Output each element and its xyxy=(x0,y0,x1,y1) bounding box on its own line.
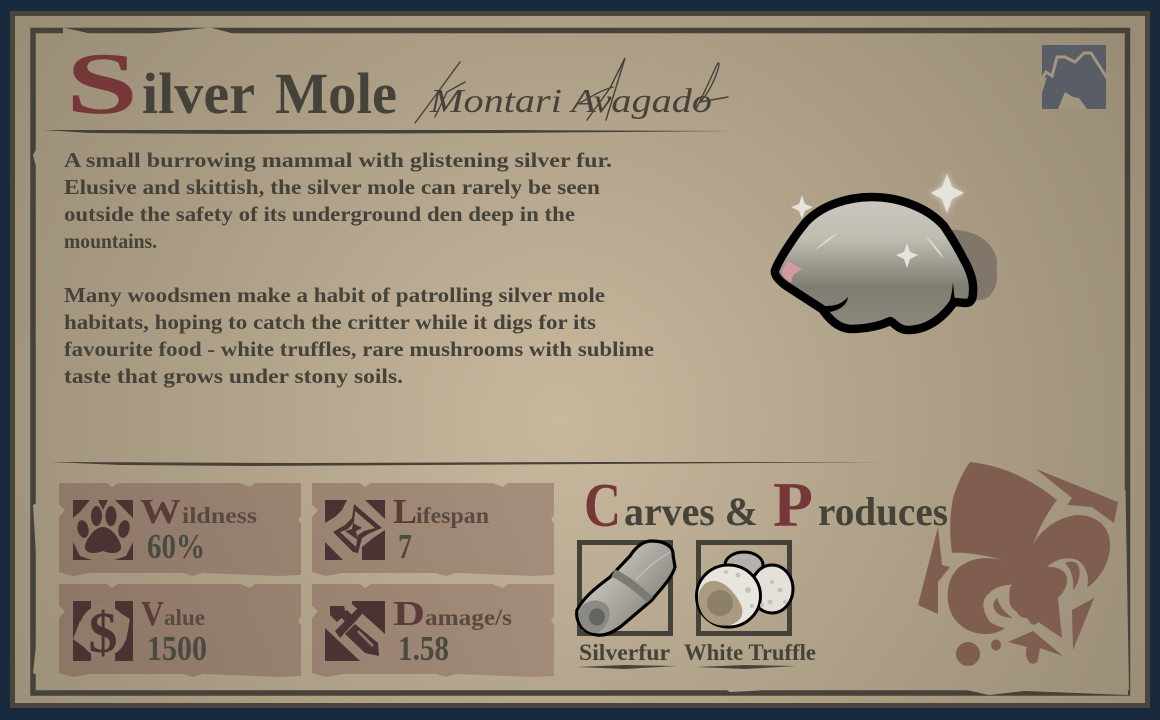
title: S xyxy=(66,36,138,133)
item: White Truffle xyxy=(684,542,816,669)
signature: Montari Avagado xyxy=(415,58,728,123)
divider: stats rule xyxy=(50,462,885,466)
title: Mole xyxy=(275,61,397,126)
panel: Wildness stat xyxy=(59,483,301,576)
icon: dollar: $ xyxy=(88,600,118,665)
panel: Damage stat: amage/s xyxy=(425,605,512,630)
text block: description xyxy=(64,148,654,388)
far paw shadow xyxy=(950,230,997,301)
value: 7 xyxy=(398,527,412,566)
icon: truffles xyxy=(696,552,793,627)
icon: hourglass xyxy=(325,500,385,560)
panel: Value stat xyxy=(59,584,301,677)
text block: description: A small burrowing mammal with glistening silver fur. xyxy=(64,148,612,172)
label: Silverfur xyxy=(579,640,670,665)
text block: description: Many woodsmen make a habit of patrolling silver mole xyxy=(64,283,605,307)
panel: Lifespan stat xyxy=(312,483,554,576)
label: L xyxy=(393,492,417,531)
text block: description: mountains. xyxy=(64,229,157,253)
text block: description: taste that grows under stony soils. xyxy=(64,364,403,388)
panel: Wildness stat: ildness xyxy=(182,503,257,528)
mole body xyxy=(775,197,973,330)
fold lines xyxy=(824,282,955,312)
text block: description: habitats, hoping to catch the critter while it digs for its xyxy=(64,310,596,334)
text block: description: Elusive and skittish, the silver mole can rarely be seen xyxy=(64,175,600,199)
title xyxy=(66,36,397,133)
illustration: silver mole xyxy=(775,172,997,330)
heading: Carves & Produces: P xyxy=(773,469,813,540)
title: ilver xyxy=(142,61,255,126)
icon: sword xyxy=(325,601,385,661)
icon: paw xyxy=(73,500,133,560)
heading: Carves & Produces: arves & xyxy=(624,489,758,534)
icon: dollar xyxy=(73,600,133,665)
value: 1.58 xyxy=(398,629,449,668)
value: 60% xyxy=(147,527,205,566)
panel: Lifespan stat: ifespan xyxy=(416,503,489,528)
heading: Carves & Produces: roduces xyxy=(818,489,948,534)
panel: Value stat: alue xyxy=(164,605,205,630)
item: Silverfur xyxy=(577,541,677,669)
label: D xyxy=(393,594,425,633)
label: V xyxy=(141,594,164,633)
text block: description: outside the safety of its underground den deep in the xyxy=(64,202,575,226)
label: White Truffle xyxy=(684,640,816,665)
nose xyxy=(782,261,802,283)
heading: Carves & Produces: C xyxy=(584,472,621,540)
underline xyxy=(577,665,677,669)
underline xyxy=(696,665,796,669)
signature: Montari Avagado: Montari Avagado xyxy=(429,83,712,120)
text block: description: favourite food - white truffles, rare mushrooms with sublime xyxy=(64,337,654,361)
panel: Damage stat xyxy=(312,584,554,677)
sparkles xyxy=(791,172,964,268)
fur highlights xyxy=(815,233,943,258)
label: W xyxy=(140,492,181,531)
icon: mountain region badge xyxy=(1041,45,1107,109)
heading: Carves & Produces xyxy=(584,469,948,540)
divider: title rule xyxy=(43,130,733,134)
value: 1500 xyxy=(147,629,207,668)
icon: fleur-de-lis emblem xyxy=(918,462,1118,666)
icon: fur roll xyxy=(577,541,675,635)
